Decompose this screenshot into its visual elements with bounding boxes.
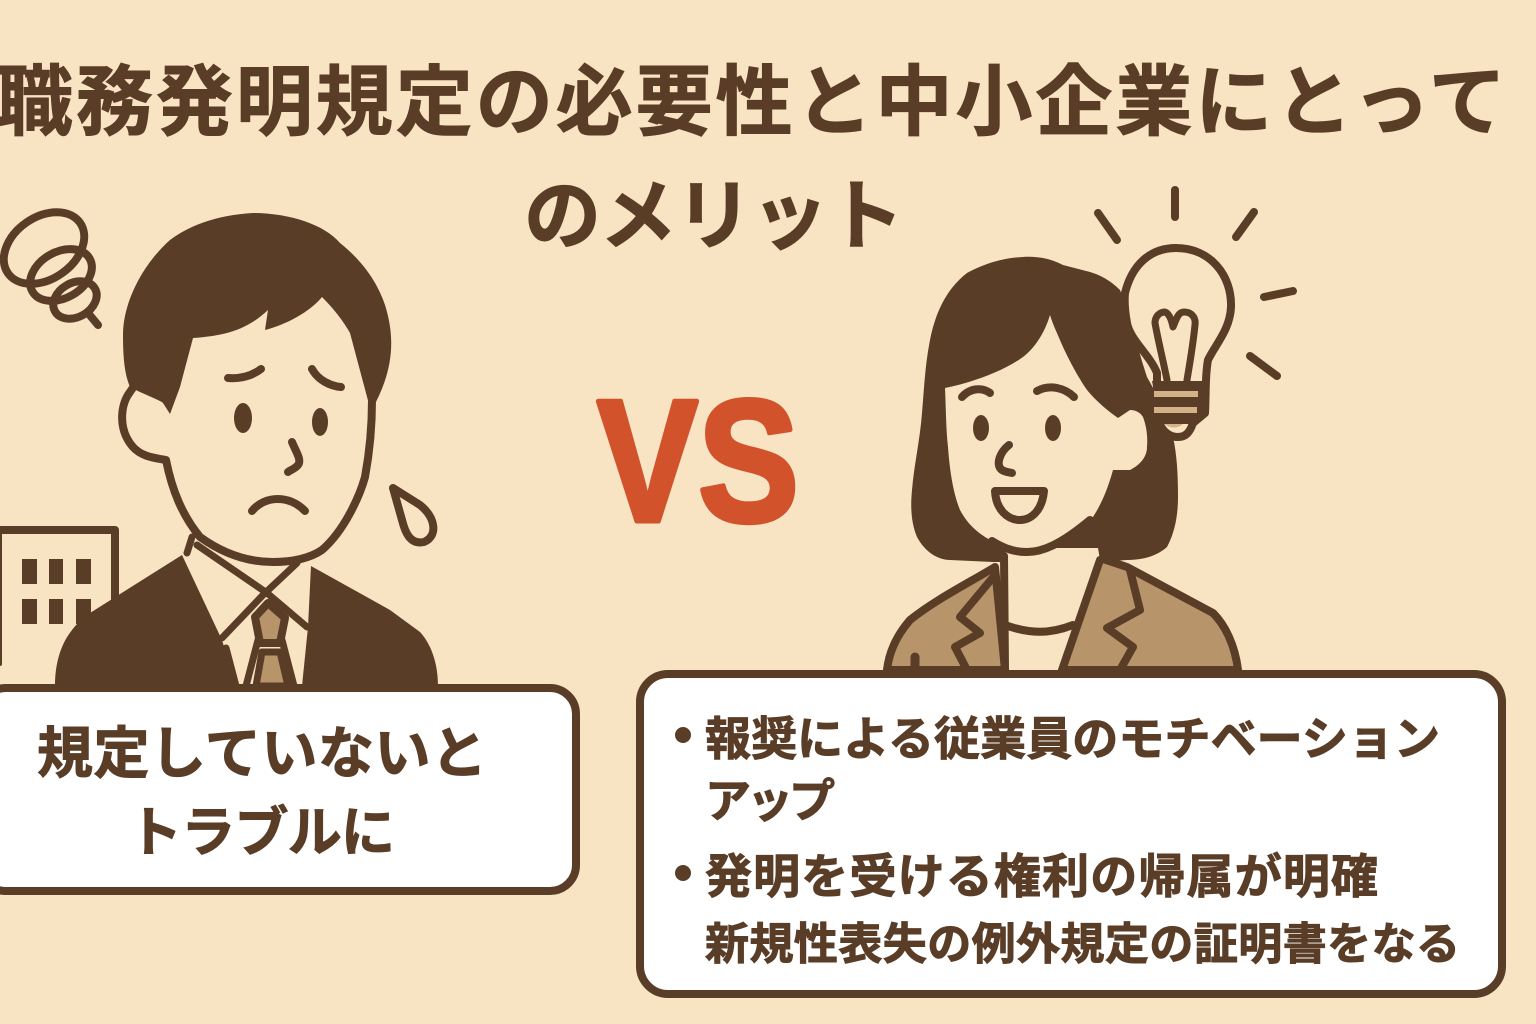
icon: confusion spiral [0, 197, 103, 326]
woman hair [911, 257, 1178, 562]
icon: light bulb [1125, 248, 1231, 437]
illustration: troubled man [0, 197, 438, 686]
icon: office building [0, 530, 115, 664]
woman lapels [915, 570, 1140, 670]
woman face [945, 315, 1147, 552]
callout: right merits box [640, 674, 1502, 994]
title: のメリット [524, 174, 904, 260]
bullet: invention rights: 新規性表失の例外規定の証明書をなる [705, 920, 1460, 969]
bullet: invention rights: 発明を受ける権利の帰属が明確 [705, 850, 1378, 903]
callout: left problem box: 規定していないと [37, 722, 487, 785]
icon: light rays [1098, 190, 1293, 376]
man jacket [55, 555, 438, 686]
woman jacket [887, 558, 1238, 670]
bullet: motivation: 報奨による従業員のモチベーション [705, 713, 1440, 765]
man hair [123, 213, 391, 414]
icon: sweat drop [393, 488, 433, 542]
callout: left problem box [0, 688, 576, 891]
woman mouth [995, 491, 1044, 520]
man expression [228, 369, 341, 511]
title: 職務発明規定の必要性と中小企業にとって [0, 60, 1506, 146]
woman expression [962, 387, 1074, 473]
man face [122, 280, 372, 562]
woman neck and blouse [1005, 548, 1100, 670]
illustration: smiling woman with light bulb [887, 190, 1293, 670]
woman chin line [992, 520, 1090, 552]
bullet: invention rights [675, 850, 1460, 969]
bullet: motivation [675, 713, 1440, 827]
callout: left problem box: トラブルに [128, 803, 395, 863]
VS label: VS [597, 363, 799, 558]
man shirt and collar [186, 556, 310, 686]
man tie [255, 603, 288, 686]
title [0, 60, 1506, 260]
bullet: motivation: アップ [705, 775, 835, 827]
